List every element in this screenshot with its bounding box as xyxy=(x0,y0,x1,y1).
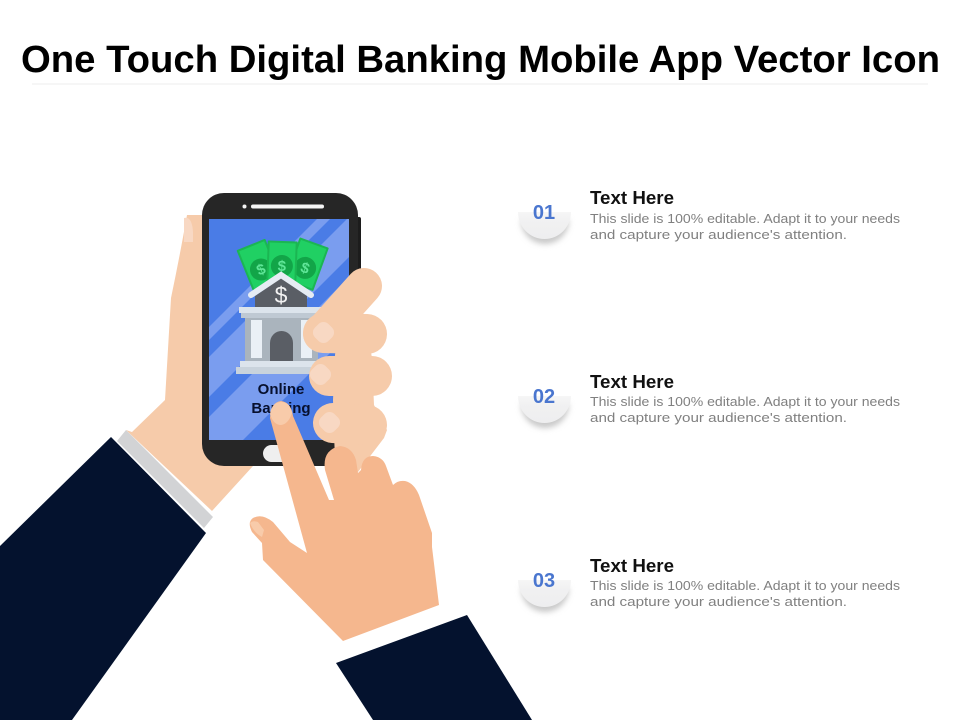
phone home button xyxy=(263,445,301,462)
finger two xyxy=(323,333,367,334)
banknotes icon: $ xyxy=(277,258,287,275)
phone screen xyxy=(209,219,349,440)
text block 03: This slide is 100% editable. Adapt it to your needs xyxy=(590,579,900,593)
text block 02 xyxy=(590,372,900,425)
back of gripping hand xyxy=(333,295,387,472)
index fingernail xyxy=(270,402,292,425)
item 01 xyxy=(512,186,900,244)
finger one xyxy=(321,286,364,334)
pointing hand xyxy=(250,401,439,641)
text block 02: and capture your audience's attention. xyxy=(590,411,847,425)
text block 01: and capture your audience's attention. xyxy=(590,228,847,242)
badge 02 xyxy=(512,370,578,428)
text block 01 xyxy=(590,188,900,242)
smartphone xyxy=(202,193,361,466)
text block 02: This slide is 100% editable. Adapt it to your needs xyxy=(590,395,900,409)
bank building icon: $ xyxy=(275,282,288,308)
thumbnail xyxy=(250,521,264,537)
text block 03 xyxy=(590,556,900,609)
text block 02: Text Here xyxy=(590,372,674,392)
badge 02: 02 xyxy=(533,386,555,408)
gripping fingers xyxy=(184,218,387,472)
phone body xyxy=(202,193,358,466)
screen label: Online xyxy=(258,381,304,398)
badge 01 xyxy=(512,186,578,244)
left suit sleeve xyxy=(0,437,206,720)
bank building icon xyxy=(236,275,325,374)
holding hand xyxy=(126,215,300,511)
text block 01: This slide is 100% editable. Adapt it to your needs xyxy=(590,212,900,226)
banknotes icon: $ xyxy=(254,260,269,279)
finger three xyxy=(329,356,372,396)
phone speaker xyxy=(242,204,324,208)
shirt cuff xyxy=(117,430,213,528)
badge 03 xyxy=(512,554,578,612)
item 03 xyxy=(512,554,900,612)
item 02 xyxy=(512,370,900,428)
text block 01: Text Here xyxy=(590,188,674,208)
badge 03: 03 xyxy=(533,570,555,592)
badge 01: 01 xyxy=(533,202,555,224)
banknotes icon xyxy=(236,237,329,293)
screen label: Banking xyxy=(251,400,311,417)
text block 03: and capture your audience's attention. xyxy=(590,595,847,609)
phone side button xyxy=(350,217,361,297)
right suit sleeve xyxy=(336,615,532,720)
title: One Touch Digital Banking Mobile App Vector Icon xyxy=(21,39,940,81)
text block 03: Text Here xyxy=(590,556,674,576)
fingernails xyxy=(184,218,343,436)
finger four xyxy=(333,423,367,425)
banknotes icon: $ xyxy=(298,259,312,278)
